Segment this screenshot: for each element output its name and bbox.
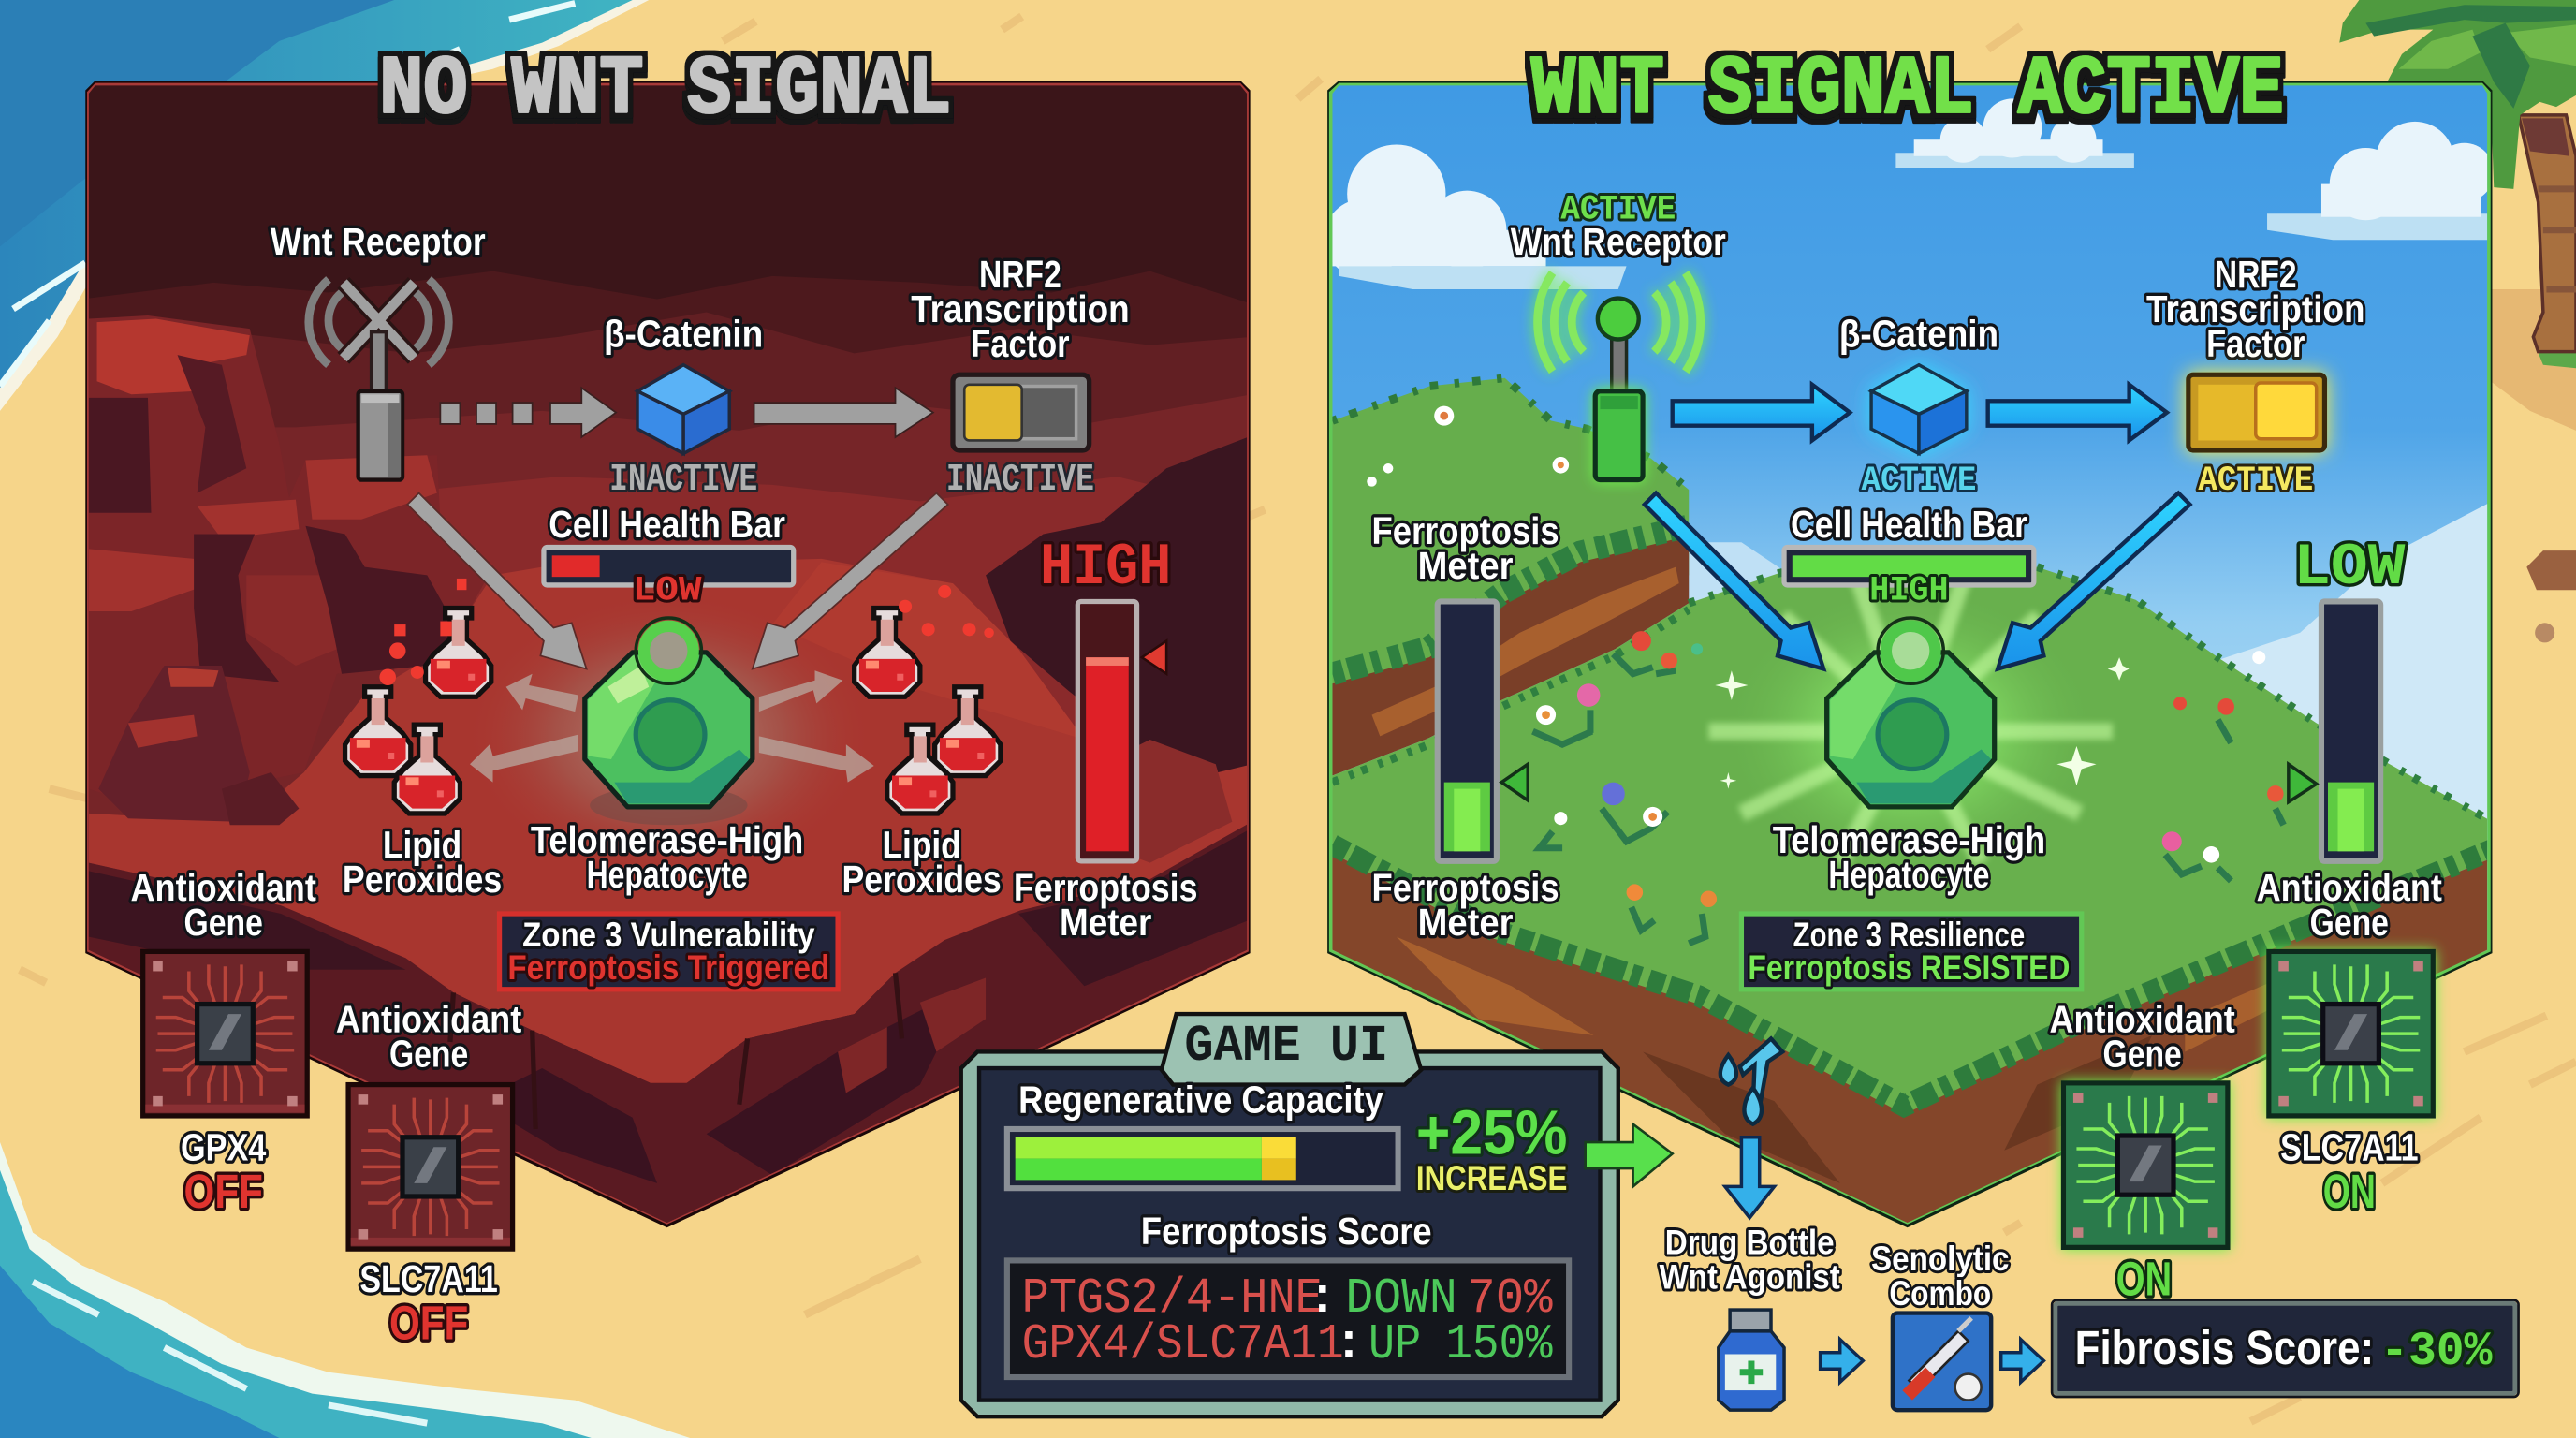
scenery: clouds bbox=[1325, 98, 2494, 289]
icon: switch on bbox=[2188, 374, 2324, 450]
ferroptosis score: 70% bbox=[1467, 1270, 1553, 1327]
scenery: dirt underside bbox=[1327, 853, 2492, 1233]
zone 3 resilience callout bbox=[1741, 914, 2082, 990]
cell health bar right: HIGH bbox=[1869, 572, 1949, 611]
icon: drops and pipette bbox=[1720, 1038, 1782, 1124]
lipid label right bbox=[842, 823, 1002, 901]
arrow: green out of game ui bbox=[1586, 1124, 1673, 1186]
nrf2 label right: Factor bbox=[2206, 322, 2305, 365]
scenery: lower cliff bbox=[82, 822, 1251, 1233]
hepatocyte label right bbox=[1773, 818, 2045, 896]
cell health bar left bbox=[544, 503, 794, 611]
cell health bar right bbox=[1784, 503, 2034, 611]
arrow: bottle to combo bbox=[1821, 1340, 1863, 1382]
arrow: dashed inactive bbox=[440, 388, 616, 437]
fibrosis score box bbox=[2052, 1300, 2519, 1397]
scenery: main grass field bbox=[1332, 559, 2492, 1114]
zone 3 vulnerability callout: Ferroptosis Triggered bbox=[507, 948, 829, 987]
arrow: grey diagonal from receptor bbox=[407, 493, 587, 668]
icon: blue cube inactive bbox=[637, 365, 729, 453]
icon: hepatocyte cell right bbox=[1827, 618, 1995, 807]
right active receptor label: Wnt Receptor bbox=[1511, 220, 1726, 263]
icon: senolytic combo bbox=[1893, 1313, 1991, 1410]
ocean bottom left bbox=[0, 1142, 690, 1438]
scenery: red cliffs bbox=[89, 315, 485, 606]
sparkles bbox=[1715, 657, 2130, 789]
red particles bbox=[379, 579, 994, 685]
icon: lipid peroxide flasks right bbox=[855, 609, 1001, 814]
gene chip gpx4 off: GPX4 bbox=[181, 1125, 267, 1168]
panel: wnt signal active bbox=[1325, 81, 2494, 1233]
right low meter bbox=[2289, 534, 2406, 861]
scenery: volcanic bands bbox=[88, 271, 1247, 813]
gene chip gpx4 on: Gene bbox=[2103, 1032, 2182, 1075]
ferroptosis score: : bbox=[1308, 1270, 1338, 1327]
green rays around cell bbox=[1708, 575, 2113, 879]
gene chip gpx4 off: Antioxidant bbox=[131, 866, 316, 909]
icon: switch off bbox=[953, 374, 1090, 450]
zone 3 vulnerability callout: Zone 3 Vulnerability bbox=[522, 916, 815, 954]
panel: no wnt signal bbox=[82, 81, 1251, 1233]
gene chip slc7a11 on: ON bbox=[2323, 1165, 2376, 1218]
icon: active antenna bbox=[1538, 272, 1701, 480]
active tag switch: ACTIVE bbox=[2198, 462, 2313, 501]
zone 3 resilience callout: Ferroptosis RESISTED bbox=[1748, 948, 2070, 987]
nrf2 label left bbox=[911, 253, 1130, 365]
right active receptor label: ACTIVE bbox=[1560, 190, 1676, 229]
hepatocyte label left: Hepatocyte bbox=[587, 853, 748, 896]
lipid label right: Lipid bbox=[882, 823, 961, 866]
gene chip gpx4 off: Gene bbox=[184, 901, 263, 944]
nrf2 label left: Factor bbox=[971, 322, 1070, 365]
nrf2 label left: NRF2 bbox=[979, 253, 1061, 296]
arrow: blue catenin to nrf2 bbox=[1988, 385, 2167, 440]
fibrosis score box: Fibrosis Score: bbox=[2075, 1321, 2374, 1374]
ferroptosis meter low: Meter bbox=[1418, 901, 1514, 944]
hepatocyte label right: Hepatocyte bbox=[1828, 853, 1989, 896]
gene chip gpx4 off: OFF bbox=[184, 1165, 263, 1218]
nrf2 label right: NRF2 bbox=[2215, 253, 2297, 296]
increase stat: INCREASE bbox=[1416, 1159, 1567, 1197]
ferroptosis meter high bbox=[1014, 534, 1197, 944]
ferroptosis meter low: Ferroptosis bbox=[1372, 509, 1559, 552]
scenery: flowers bbox=[1367, 406, 2284, 944]
lipid label right: Peroxides bbox=[842, 858, 1002, 901]
icon: lipid peroxide flasks left bbox=[345, 609, 491, 814]
icon: broken antenna bbox=[309, 279, 448, 480]
ferroptosis score: GPX4/SLC7A11 bbox=[1022, 1316, 1344, 1372]
cell health bar left: Cell Health Bar bbox=[549, 503, 785, 546]
gene chip gpx4 off bbox=[131, 866, 316, 1218]
palm tree bbox=[2339, 0, 2576, 431]
nrf2 label right: Transcription bbox=[2146, 287, 2364, 330]
ferroptosis score: DOWN bbox=[1345, 1270, 1457, 1327]
inactive tag switch: INACTIVE bbox=[946, 459, 1094, 502]
fibrosis score box: -30% bbox=[2380, 1326, 2493, 1379]
ferroptosis score: 150% bbox=[1445, 1316, 1553, 1372]
lipid label left bbox=[343, 823, 502, 901]
lipid label left: Peroxides bbox=[343, 858, 502, 901]
scenery: left hill bbox=[1333, 378, 1689, 683]
gene chip slc7a11 off: OFF bbox=[389, 1297, 468, 1350]
gene chip slc7a11 on: SLC7A11 bbox=[2280, 1125, 2419, 1168]
arrow: combo to fibrosis bbox=[2001, 1340, 2043, 1382]
gene chip gpx4 on bbox=[2049, 997, 2235, 1305]
increase stat: +25% bbox=[1416, 1098, 1567, 1167]
drug label: Wnt Agonist bbox=[1660, 1257, 1840, 1296]
ferroptosis meter low: Ferroptosis bbox=[1372, 866, 1559, 909]
cell health glow left bbox=[463, 592, 874, 881]
arrow: blue from receptor to catenin bbox=[1673, 385, 1850, 440]
ferroptosis meter low: Meter bbox=[1418, 544, 1514, 587]
heading: no wnt signal: NO WNT SIGNAL bbox=[379, 44, 951, 137]
gene chip slc7a11 on: Antioxidant bbox=[2257, 866, 2442, 909]
rocks on sand bbox=[2526, 550, 2576, 642]
panel: game ui bbox=[961, 1014, 1618, 1416]
gene chip gpx4 on: ON bbox=[2116, 1252, 2172, 1305]
arrow: blue diagonal from nrf2 bbox=[1998, 493, 2190, 668]
icon: glowing cube bbox=[1871, 365, 1967, 453]
ferroptosis meter high: Meter bbox=[1060, 901, 1152, 944]
gene chip slc7a11 on: Gene bbox=[2310, 901, 2389, 944]
ferroptosis score: PTGS2/4-HNE bbox=[1022, 1270, 1323, 1327]
arrow: blue diagonal from receptor bbox=[1645, 493, 1823, 668]
game ui tab: GAME UI bbox=[1184, 1019, 1388, 1076]
gene chip slc7a11 off: Antioxidant bbox=[336, 997, 521, 1040]
ferroptosis meter low bbox=[1372, 509, 1559, 944]
left wnt receptor label: Wnt Receptor bbox=[271, 220, 486, 263]
beta catenin label right: β-Catenin bbox=[1839, 312, 1998, 355]
senolytic label: Combo bbox=[1889, 1274, 1991, 1313]
nrf2 label right bbox=[2146, 253, 2364, 365]
regenerative capacity bar: Regenerative Capacity bbox=[1018, 1078, 1383, 1121]
small faded arrows outward bbox=[470, 670, 874, 783]
gene chip gpx4 on: Antioxidant bbox=[2049, 997, 2235, 1040]
senolytic label: Senolytic bbox=[1871, 1240, 2009, 1278]
ferroptosis score bbox=[1007, 1210, 1569, 1377]
ferroptosis score: UP bbox=[1368, 1316, 1421, 1372]
ferroptosis meter high: HIGH bbox=[1040, 534, 1171, 601]
gene chip slc7a11 off: SLC7A11 bbox=[359, 1257, 498, 1300]
right low meter: LOW bbox=[2293, 534, 2406, 601]
arrow: grey diagonal from nrf2 bbox=[753, 493, 948, 668]
zone 3 vulnerability callout bbox=[500, 914, 838, 990]
arrow: blue down bbox=[1725, 1137, 1775, 1218]
drug label bbox=[1660, 1223, 1840, 1296]
right active receptor label bbox=[1511, 190, 1726, 263]
beta catenin label left: β-Catenin bbox=[604, 312, 763, 355]
zone 3 resilience callout: Zone 3 Resilience bbox=[1793, 916, 2025, 954]
icon: drug bottle bbox=[1719, 1310, 1784, 1410]
hepatocyte label left bbox=[531, 818, 803, 896]
ocean top left bbox=[0, 0, 649, 411]
senolytic label bbox=[1871, 1240, 2009, 1313]
game ui tab bbox=[1162, 1014, 1421, 1085]
icon: hepatocyte cell left bbox=[585, 618, 753, 825]
hepatocyte label left: Telomerase-High bbox=[531, 818, 803, 861]
ferroptosis meter high: Ferroptosis bbox=[1014, 866, 1197, 909]
gene chip slc7a11 on bbox=[2257, 866, 2442, 1218]
arrow: solid grey bbox=[754, 388, 933, 437]
increase stat bbox=[1416, 1098, 1567, 1197]
ferroptosis score: : bbox=[1334, 1316, 1364, 1372]
hepatocyte label right: Telomerase-High bbox=[1773, 818, 2045, 861]
lipid label left: Lipid bbox=[383, 823, 461, 866]
gene chip slc7a11 off: Gene bbox=[389, 1032, 468, 1075]
drug label: Drug Bottle bbox=[1665, 1223, 1835, 1261]
cell health bar right: Cell Health Bar bbox=[1791, 503, 2027, 546]
cell health bar left: LOW bbox=[633, 572, 702, 611]
ferroptosis score: Ferroptosis Score bbox=[1141, 1210, 1432, 1253]
active tag cube: ACTIVE bbox=[1862, 462, 1976, 501]
inactive tag cube: INACTIVE bbox=[609, 459, 757, 502]
gene chip slc7a11 off bbox=[336, 997, 521, 1350]
regenerative capacity bar bbox=[1007, 1078, 1398, 1188]
heading: wnt signal active: WNT SIGNAL ACTIVE bbox=[1531, 44, 2284, 137]
nrf2 label left: Transcription bbox=[911, 287, 1130, 330]
